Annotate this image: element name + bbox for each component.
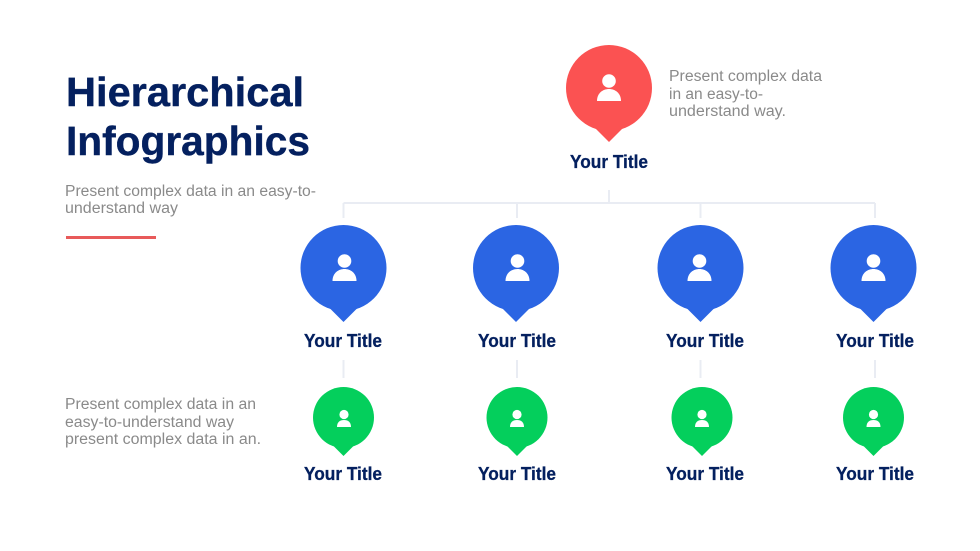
green node 3 (666, 387, 744, 484)
green pin icon 4 (843, 387, 904, 456)
title (66, 69, 310, 164)
connector lines: second level to third level (344, 360, 875, 378)
subtitle text: Present complex data in an easy-to- (65, 183, 316, 200)
title: Infographics (66, 118, 310, 164)
blue node 2 (473, 225, 559, 351)
green pin icon 1 (313, 387, 374, 456)
blue node 3 (658, 225, 744, 351)
blue pin icon 1 (300, 225, 386, 322)
blue node 1 (300, 225, 386, 351)
green node 4 label: Your Title (836, 464, 914, 484)
blue node 3 label: Your Title (666, 331, 744, 351)
lower description text: Present complex data in an (65, 396, 256, 413)
green node 2 label: Your Title (478, 464, 556, 484)
connector lines: top level to second level (344, 190, 875, 218)
blue node 1 label: Your Title (304, 331, 382, 351)
green node 4 (836, 387, 914, 484)
lower description text: easy-to-understand way (65, 414, 234, 431)
blue node 2 label: Your Title (478, 331, 556, 351)
red accent line (66, 236, 156, 239)
blue node 4 label: Your Title (836, 331, 914, 351)
blue pin icon 2 (473, 225, 559, 322)
blue node 4 (830, 225, 916, 351)
green node 3 label: Your Title (666, 464, 744, 484)
subtitle text (65, 183, 316, 217)
top description text: in an easy-to- (669, 86, 763, 103)
top description text: understand way. (669, 103, 786, 120)
top description text: Present complex data (669, 68, 822, 85)
blue pin icon 3 (658, 225, 744, 322)
green node 2 (478, 387, 556, 484)
green node 1 label: Your Title (304, 464, 382, 484)
lower description text (65, 396, 261, 448)
red top node (566, 45, 652, 172)
red node label: Your Title (570, 152, 648, 172)
lower description text: present complex data in an. (65, 431, 261, 448)
blue pin icon 4 (830, 225, 916, 322)
green pin icon 3 (672, 387, 732, 456)
subtitle text: understand way (65, 200, 178, 217)
green node 1 (304, 387, 382, 484)
title: Hierarchical (66, 69, 304, 115)
red pin icon (566, 45, 652, 142)
green pin icon 2 (486, 387, 548, 456)
top description text (669, 68, 822, 120)
